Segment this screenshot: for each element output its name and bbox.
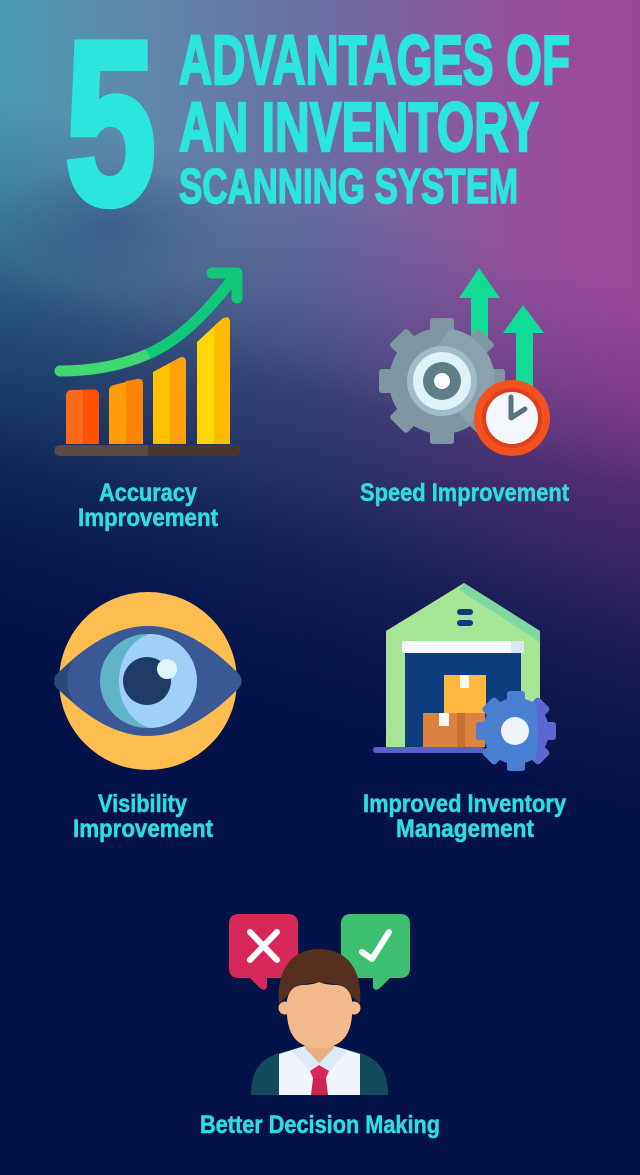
panel: better decision making xyxy=(200,914,440,1139)
panel: speed improvement xyxy=(360,268,570,507)
panel: accuracy improvement xyxy=(54,273,240,532)
icon: warehouse with boxes and gear xyxy=(373,583,556,771)
label: accuracy improvement: Accuracy xyxy=(99,479,197,507)
label: improved inventory management xyxy=(363,790,566,843)
icon: gear, arrows and clock xyxy=(379,268,550,456)
label: improved inventory management: Management xyxy=(396,815,535,843)
icon: green speech bubble with check xyxy=(341,914,410,990)
panel: visibility improvement xyxy=(54,592,242,843)
icon: person xyxy=(251,949,388,1095)
label: better decision making: Better Decision Making xyxy=(200,1111,440,1139)
label: speed improvement: Speed Improvement xyxy=(360,479,570,507)
label: visibility improvement: Improvement xyxy=(73,815,214,843)
label: visibility improvement xyxy=(73,790,214,843)
label: visibility improvement: Visibility xyxy=(98,790,187,818)
icon: eye xyxy=(54,592,242,770)
title numeral 5: 5 xyxy=(65,0,156,253)
label: accuracy improvement xyxy=(78,479,219,532)
label: accuracy improvement: Improvement xyxy=(78,504,219,532)
label: improved inventory management: Improved Inventory xyxy=(363,790,566,818)
panel: improved inventory management xyxy=(363,583,566,843)
title xyxy=(65,0,570,253)
icon: red speech bubble with cross xyxy=(229,914,298,990)
icon: rising bar chart xyxy=(54,273,240,456)
